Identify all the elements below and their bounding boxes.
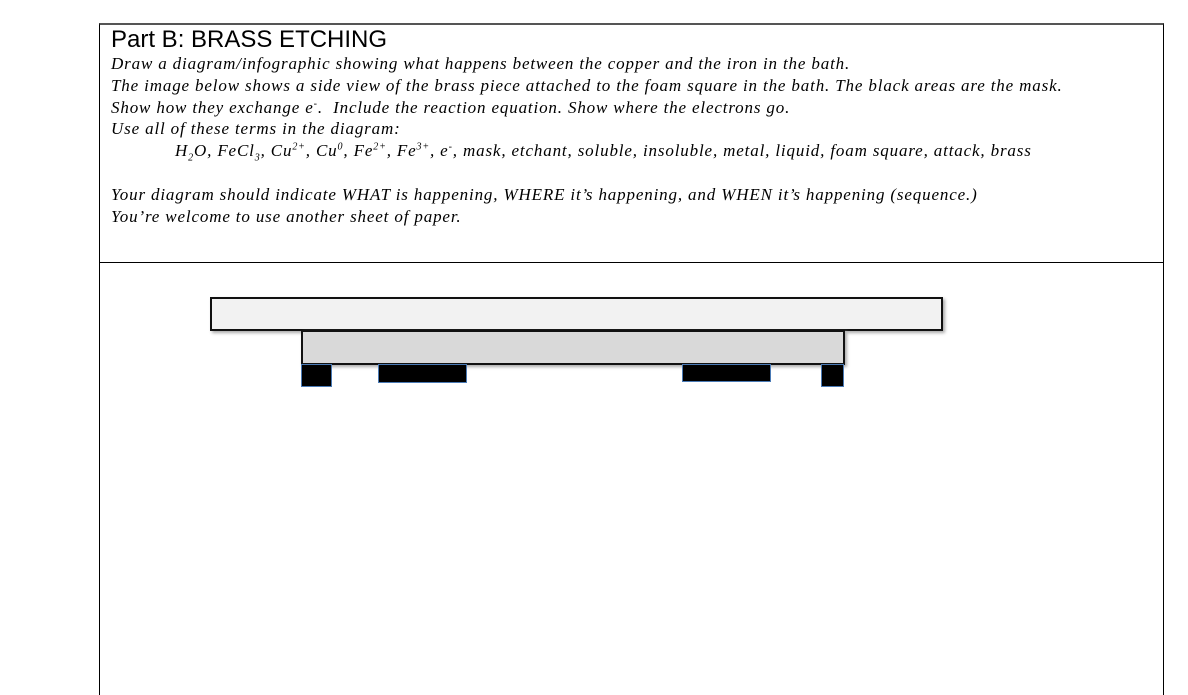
frame: top panel: [99, 23, 1164, 263]
text: The image below shows a side view of the brass piece attached to the foam square in the bath. The black areas are the mask.: [111, 76, 1063, 95]
text: Your diagram should indicate WHAT is happening, WHERE it’s happening, and WHEN it’s happening (sequence.): [111, 185, 978, 204]
frame: bottom panel: [99, 262, 1164, 695]
text: Use all of these terms in the diagram:: [111, 119, 401, 138]
diagram: brass piece: [301, 330, 845, 365]
diagram: foam square: [210, 297, 943, 331]
text: You’re welcome to use another sheet of paper.: [111, 207, 462, 226]
instructions text: [110, 54, 1063, 226]
text: Show how they exchange e-. Include the reaction equation. Show where the electrons go.: [111, 98, 790, 117]
text: Draw a diagram/infographic showing what happens between the copper and the iron in the bath.: [111, 54, 850, 73]
title: Part B: BRASS ETCHING: [111, 26, 387, 53]
diagram: masks: [301, 364, 844, 387]
text: H2O, FeCl3, Cu2+, Cu0, Fe2+, Fe3+, e-, mask, etchant, soluble, insoluble, metal, liquid, foam square, attack, brass: [175, 141, 1032, 163]
